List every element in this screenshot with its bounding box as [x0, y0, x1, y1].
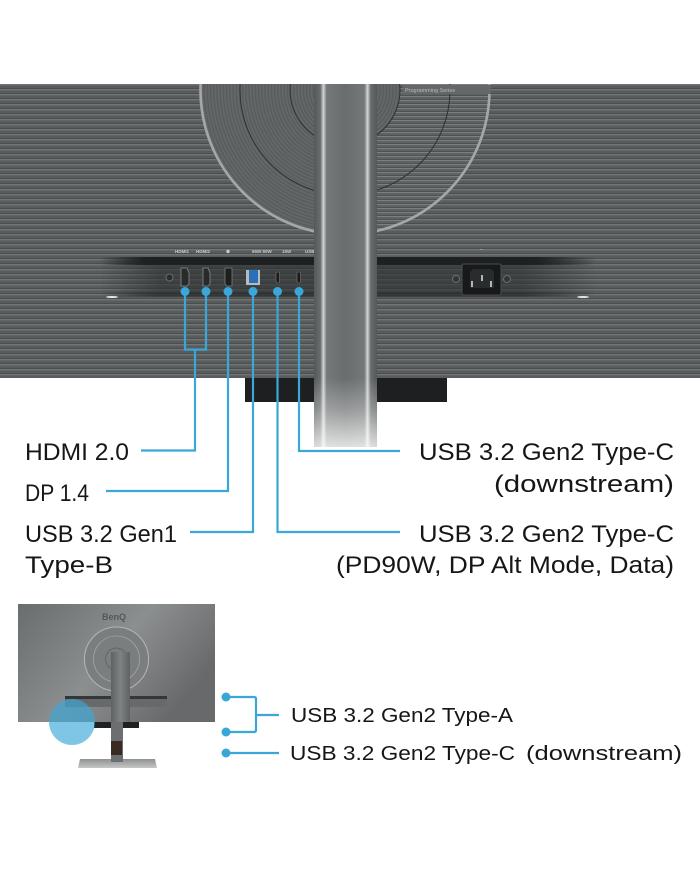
mini stand column	[111, 652, 130, 722]
mini cable clip	[111, 741, 122, 755]
port legend labels: USB	[305, 249, 315, 254]
programming series plate	[403, 85, 491, 94]
ribbed back panel	[0, 84, 700, 378]
label: USB Type-A: USB 3.2 Gen2 Type-A	[291, 705, 514, 727]
label: USB Type-C downstream: USB 3.2 Gen2 Type-C	[290, 743, 515, 765]
mini lower column	[111, 722, 123, 762]
label: USB-C downstream: USB 3.2 Gen2 Type-C	[419, 439, 674, 466]
mini screen back	[18, 604, 215, 722]
label: HDMI 2.0: HDMI 2.0	[25, 439, 129, 466]
circular stand mount	[199, 84, 491, 233]
port legend labels: 65W 90W	[252, 249, 273, 254]
port legend labels: 15W	[282, 249, 292, 254]
programming series plate: Programming Series	[405, 88, 455, 94]
connector: DP 1.4	[106, 287, 232, 491]
label: USB Type-C downstream: (downstream)	[526, 743, 682, 765]
port legend labels: HDMI1	[175, 249, 189, 254]
port legend labels: ~	[480, 247, 483, 252]
mini stand base	[78, 759, 157, 768]
port recess	[100, 257, 596, 298]
mini port recess	[65, 696, 167, 707]
connector: USB-C PD90W	[273, 287, 400, 532]
connector: USB Type-B	[190, 287, 258, 532]
infographic canvas	[0, 84, 700, 768]
label: USB-C PD90W: USB 3.2 Gen2 Type-C	[419, 521, 674, 548]
rear USB connectors	[222, 692, 279, 758]
label: USB 3.2 Gen1 Type-B: Type-B	[25, 552, 113, 579]
monitor rear close-up	[0, 84, 700, 378]
power socket	[452, 264, 510, 295]
connector: HDMI 2.0	[141, 287, 210, 450]
mini logo: BenQ	[102, 612, 126, 622]
connector: USB Type-C	[222, 748, 279, 758]
port legend labels	[175, 249, 482, 254]
small monitor illustration	[18, 604, 215, 768]
blue highlight circle	[49, 699, 95, 745]
label: USB-C downstream	[419, 439, 674, 498]
label: DP 1.4: DP 1.4	[25, 480, 89, 507]
label: USB Type-C downstream	[290, 743, 682, 765]
ports row	[166, 268, 300, 286]
connector: USB-C downstream	[294, 287, 400, 451]
port legend labels: HDMI2	[196, 249, 210, 254]
mini mount rings	[84, 627, 148, 691]
connector lines and dots	[106, 287, 400, 532]
label: USB 3.2 Gen1 Type-B: USB 3.2 Gen1	[25, 521, 177, 548]
label: USB-C downstream: (downstream)	[494, 471, 674, 498]
connector: USB Type-A pair	[222, 692, 279, 736]
label: USB-C PD90W: (PD90W, DP Alt Mode, Data)	[336, 552, 674, 579]
mini black block	[94, 722, 139, 728]
label: USB-C PD90W	[336, 521, 674, 579]
central stand column	[314, 84, 377, 448]
black rear block below the monitor	[245, 378, 447, 402]
label: USB 3.2 Gen1 Type-B	[25, 521, 177, 579]
